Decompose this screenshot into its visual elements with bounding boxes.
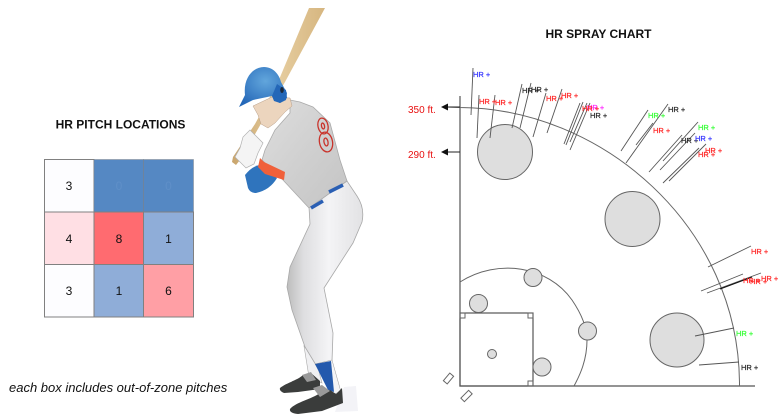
cell: bottom right 6 [144, 264, 194, 317]
HR labels: HR + [751, 247, 769, 256]
HR labels: HR + [743, 276, 761, 285]
spray lines [471, 68, 761, 365]
infield diamond [460, 313, 533, 386]
HR labels: HR + [668, 105, 686, 114]
helmet [239, 67, 287, 107]
HR labels: HR + [750, 277, 768, 286]
front shoe [290, 388, 343, 414]
HR labels: HR + [473, 70, 491, 79]
belt loops [311, 185, 343, 208]
jersey number 8 [316, 117, 334, 153]
cell: bottom left 3 [44, 264, 94, 317]
chart: HR spray chart [408, 68, 779, 402]
front sock with blue stripe [315, 360, 341, 394]
batting gloves [235, 130, 263, 168]
cell: center 8 [94, 212, 144, 264]
distance label: 290 ft.: 290 ft. [408, 150, 436, 161]
HR labels: HR + [695, 134, 713, 143]
outfield circles [478, 124, 704, 367]
HR labels: HR + [531, 85, 549, 94]
infield circles [470, 268, 596, 376]
trousers [287, 181, 363, 365]
HR labels: HR + [741, 363, 759, 372]
HR labels: HR + [761, 274, 779, 283]
HR labels: HR + [587, 103, 605, 112]
HR labels [473, 70, 779, 372]
HR labels: HR + [736, 329, 754, 338]
heading: HR pitch locations: HR PITCH LOCATIONS [56, 118, 185, 132]
foul lines [460, 96, 755, 386]
cell: center 8: 8 [116, 232, 123, 246]
HR labels: HR + [561, 91, 579, 100]
helmet earflap [272, 84, 287, 103]
HR labels: HR + [705, 146, 723, 155]
cell: bottom right 6: 6 [165, 284, 172, 298]
jersey torso [262, 100, 347, 208]
face [253, 97, 292, 128]
sleeve arm [245, 165, 277, 193]
chart: pitch location grid [44, 160, 194, 317]
cell: top middle 0: 0 [116, 179, 123, 193]
illustration: batter [232, 8, 363, 414]
orange sleeve band [258, 158, 285, 180]
cell: middle right 1: 1 [165, 232, 172, 246]
footnote: each box includes out-of-zone pitches [9, 380, 228, 395]
bat [232, 8, 325, 165]
HR labels: HR + [653, 126, 671, 135]
HR labels: HR + [698, 123, 716, 132]
HR labels: HR + [495, 98, 513, 107]
back shoe [280, 373, 320, 393]
outfield wall arc [447, 107, 740, 386]
cell: top left 3: 3 [66, 179, 73, 193]
cell: top right 0 [144, 160, 194, 212]
HR labels: HR + [681, 136, 699, 145]
HR labels: HR + [648, 111, 666, 120]
heading: HR spray chart: HR SPRAY CHART [545, 27, 652, 41]
cell: middle left 4 [44, 212, 94, 264]
shoe shadow [335, 386, 358, 412]
290 ft marker arrow [441, 148, 460, 156]
cell: bottom middle 1: 1 [116, 284, 123, 298]
HR labels: HR + [698, 150, 716, 159]
cell: top middle 0 [94, 160, 144, 212]
cell: middle left 4: 4 [66, 232, 73, 246]
cell: top left 3 [44, 160, 94, 212]
distance label: 350 ft.: 350 ft. [408, 105, 436, 116]
cell: bottom middle 1 [94, 264, 144, 317]
batter boxes [443, 373, 472, 402]
cell: top right 0: 0 [165, 179, 172, 193]
HR labels: HR + [479, 97, 497, 106]
HR labels: HR + [582, 104, 600, 113]
infield arc [460, 268, 587, 386]
cell: middle right 1 [144, 212, 194, 264]
HR labels: HR + [590, 111, 608, 120]
helmet ear hole [280, 87, 284, 93]
cell: bottom left 3: 3 [66, 284, 73, 298]
HR labels: HR + [522, 86, 540, 95]
base markers [460, 313, 533, 386]
HR labels: HR + [546, 94, 564, 103]
back leg sock [304, 346, 322, 383]
350 ft marker arrow [441, 104, 460, 110]
